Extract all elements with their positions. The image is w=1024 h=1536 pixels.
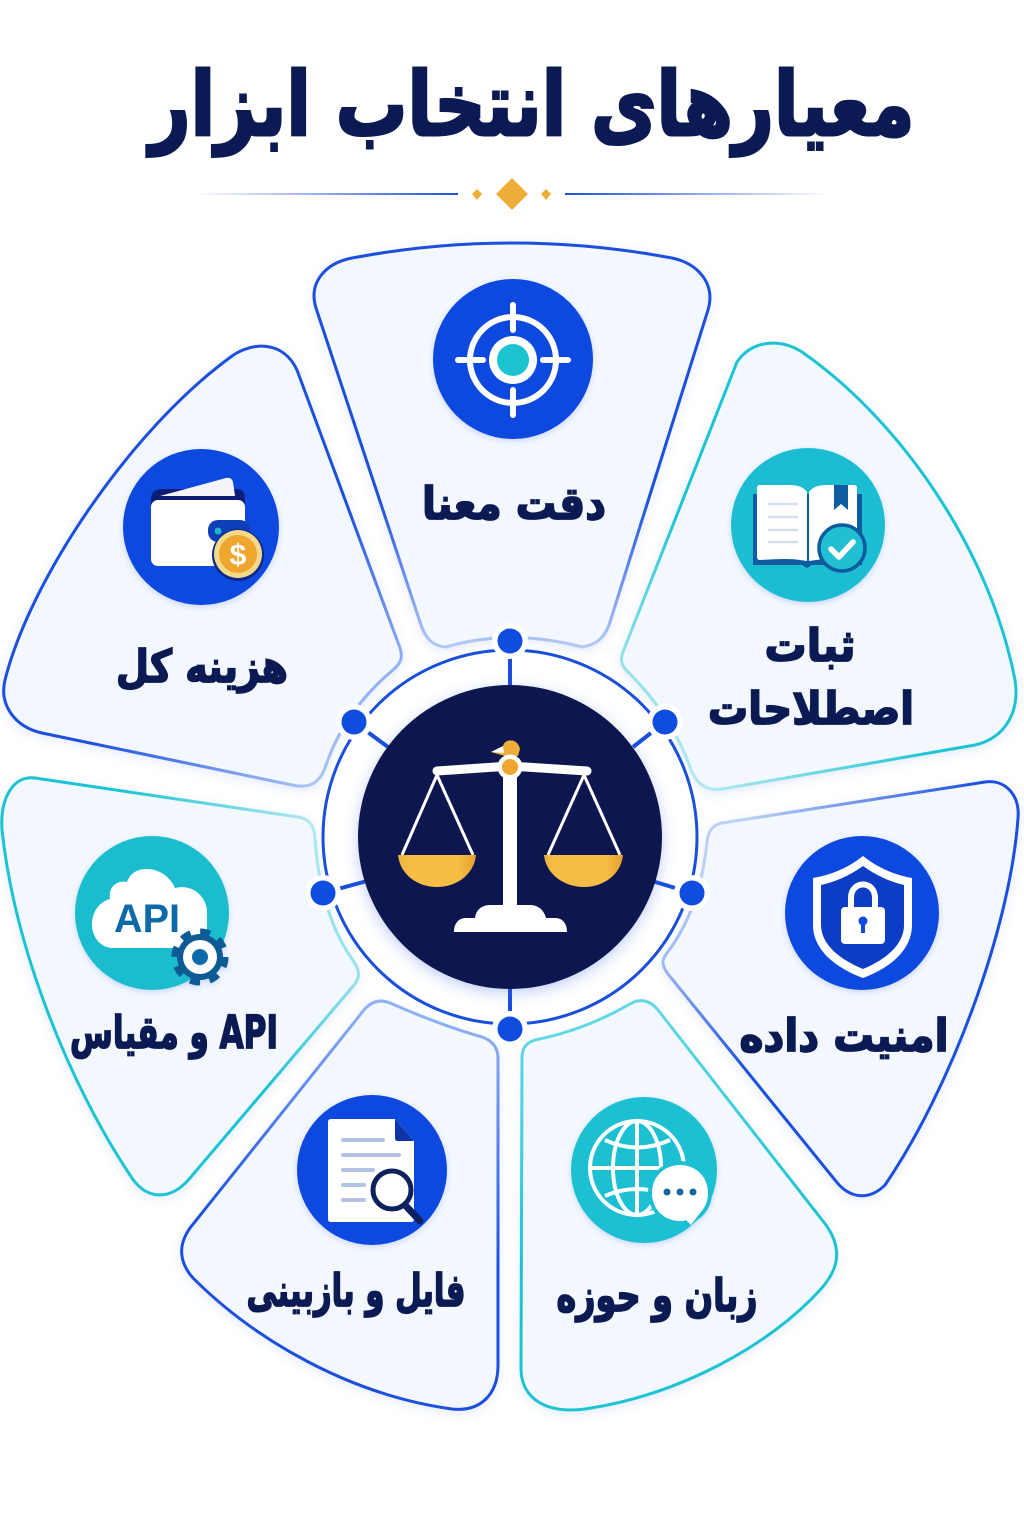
panel: semantic accuracy bbox=[314, 243, 710, 647]
icon: globe with speech bubble bbox=[571, 1097, 717, 1243]
panel: API and scale bbox=[2, 778, 359, 1195]
label: ثبات bbox=[764, 619, 856, 672]
petal shape bbox=[521, 1001, 837, 1410]
panel: file and review bbox=[182, 1001, 498, 1409]
petal shape bbox=[4, 346, 401, 786]
label: هزینه کل bbox=[116, 640, 288, 693]
icon: wallet with coin bbox=[123, 449, 279, 605]
central hub bbox=[305, 623, 710, 1047]
petal shape bbox=[314, 243, 710, 647]
label: فایل و بازبینی bbox=[246, 1264, 466, 1317]
label: دقت معنا bbox=[422, 477, 606, 530]
label: امنیت داده bbox=[740, 1009, 948, 1062]
icon: book with check bbox=[731, 448, 885, 602]
label: اصطلاحات bbox=[708, 682, 914, 735]
title divider ornament bbox=[195, 178, 830, 210]
panel: data security bbox=[663, 782, 1018, 1196]
petal shape bbox=[621, 343, 1016, 789]
label: API و مقیاس bbox=[70, 1006, 278, 1059]
icon: document with magnifier bbox=[297, 1095, 447, 1245]
icon: API cloud with gear bbox=[75, 836, 229, 990]
label bbox=[708, 619, 914, 735]
icon: shield with lock bbox=[785, 836, 939, 990]
icon: wallet with coin: $ bbox=[230, 539, 247, 572]
petal shape bbox=[663, 782, 1018, 1196]
connector nodes bbox=[305, 623, 710, 1047]
panel: total cost bbox=[4, 346, 401, 786]
icon: balance scale bbox=[398, 740, 623, 932]
label: زبان و حوزه bbox=[556, 1269, 758, 1322]
dark disc bbox=[358, 685, 662, 989]
ring with connectors bbox=[323, 641, 697, 1029]
panel: terminology consistency bbox=[621, 343, 1016, 789]
icon: API cloud with gear: API bbox=[114, 897, 180, 941]
petal shape bbox=[182, 1001, 498, 1409]
petal shape bbox=[2, 778, 359, 1195]
panel: language and domain bbox=[521, 1001, 837, 1410]
icon: target bbox=[433, 279, 593, 439]
